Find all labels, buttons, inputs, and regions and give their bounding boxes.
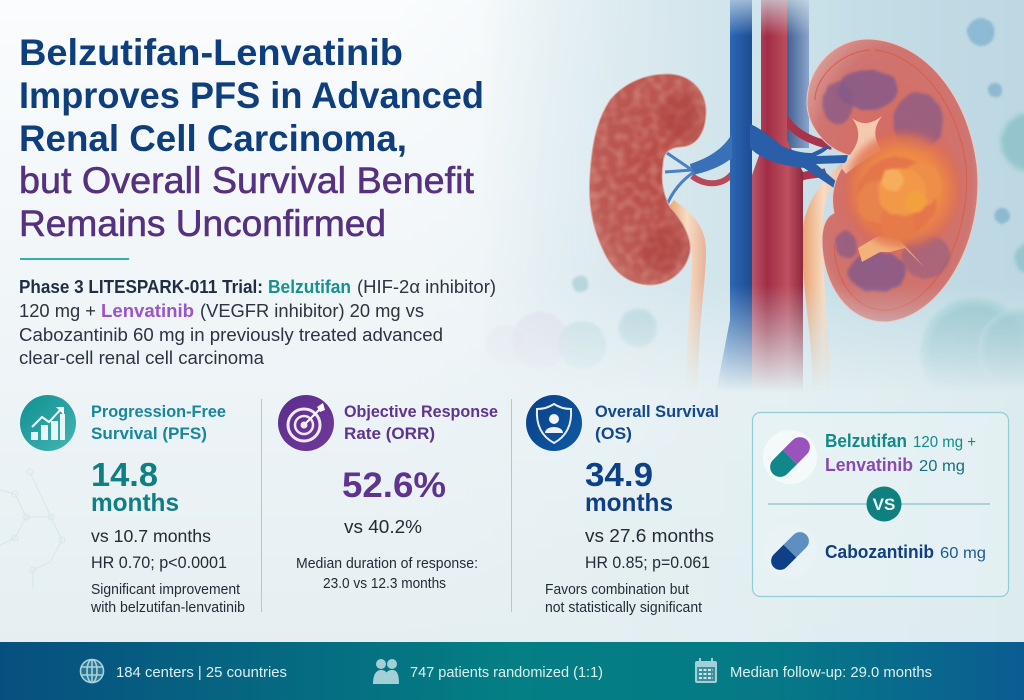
right renal vein xyxy=(750,124,848,194)
OS comparison: vs 27.6 months xyxy=(585,526,714,546)
ORR heading: Objective Response xyxy=(344,402,498,421)
cabozantinib label: Cabozantinib xyxy=(825,542,934,562)
OS comparison: Favors combination but xyxy=(545,582,689,598)
left kidney xyxy=(589,74,706,285)
left renal artery xyxy=(692,174,732,183)
PFS comparison: HR 0.70; p<0.0001 xyxy=(91,554,227,572)
ORR comparison: vs 40.2% xyxy=(344,516,422,537)
PFS value: 14.8 xyxy=(91,456,158,493)
trial description: clear-cell renal cell carcinoma xyxy=(19,348,265,368)
ORR comparison: 23.0 vs 12.3 months xyxy=(323,576,446,592)
trial description xyxy=(19,277,496,368)
renal pelvis xyxy=(840,116,882,174)
PFS comparison: vs 10.7 months xyxy=(91,526,211,546)
combination label: Lenvatinib xyxy=(825,455,913,475)
follow-up text: Median follow-up: 29.0 months xyxy=(730,664,932,681)
ORR comparison xyxy=(296,516,478,592)
OS value xyxy=(585,456,673,517)
PFS heading xyxy=(91,402,226,443)
panel: progression-free survival xyxy=(20,395,245,616)
icon: cabozantinib capsule xyxy=(763,524,817,578)
decorative cells xyxy=(513,17,1024,380)
trial description: Cabozantinib 60 mg in previously treated advanced xyxy=(19,325,443,345)
right renal arteries xyxy=(785,118,832,182)
aorta xyxy=(752,0,803,392)
icon: globe xyxy=(80,660,104,683)
icon: rising bar chart xyxy=(20,395,76,451)
title xyxy=(19,32,484,244)
title: Remains Unconfirmed xyxy=(19,203,386,244)
trial description: (VEGFR inhibitor) 20 mg vs xyxy=(200,301,424,321)
ORR heading: Rate (ORR) xyxy=(344,424,435,443)
centers text: 184 centers | 25 countries xyxy=(116,664,287,681)
combination label: 20 mg xyxy=(919,458,965,475)
ORR comparison: Median duration of response: xyxy=(296,556,478,572)
OS value: 34.9 xyxy=(585,456,653,493)
PFS comparison xyxy=(90,526,245,616)
footer bar xyxy=(0,642,1024,700)
trial description: Phase 3 LITESPARK-011 Trial: xyxy=(19,277,263,297)
icon: shield with person xyxy=(526,395,582,451)
PFS comparison: Significant improvement xyxy=(91,582,240,598)
PFS value xyxy=(91,456,179,517)
tumor xyxy=(841,128,965,252)
icon: calendar xyxy=(695,658,717,683)
illustration: kidneys and vessels xyxy=(589,0,978,392)
panel divider xyxy=(261,399,262,612)
title: Improves PFS in Advanced xyxy=(19,75,484,116)
right kidney with tumor xyxy=(807,39,978,322)
versus divider: VS xyxy=(873,495,895,514)
OS heading: Overall Survival xyxy=(595,402,719,421)
OS comparison: not statistically significant xyxy=(545,600,702,616)
PFS comparison: with belzutifan-lenvatinib xyxy=(90,600,245,616)
OS heading: (OS) xyxy=(595,424,632,443)
cabozantinib label: 60 mg xyxy=(940,545,986,562)
PFS value: months xyxy=(91,489,179,517)
patients text: 747 patients randomized (1:1) xyxy=(410,664,603,681)
panel: overall survival xyxy=(526,395,719,616)
combination label: Belzutifan xyxy=(825,431,907,451)
combination label xyxy=(825,431,976,475)
trial description: Lenvatinib xyxy=(101,301,194,321)
icon: combination capsule xyxy=(763,430,817,484)
trial description: Belzutifan xyxy=(268,277,351,297)
molecule network xyxy=(0,469,65,588)
PFS heading: Survival (PFS) xyxy=(91,424,207,443)
dark vein behind xyxy=(786,0,809,148)
medulla lobes xyxy=(823,70,950,292)
combination label: 120 mg + xyxy=(913,434,976,451)
OS comparison: HR 0.85; p=0.061 xyxy=(585,554,710,572)
right ureter xyxy=(803,163,843,382)
illustration top fade xyxy=(730,0,809,36)
panel: treatment comparison xyxy=(752,412,1008,596)
title: but Overall Survival Benefit xyxy=(19,160,475,201)
PFS heading: Progression-Free xyxy=(91,402,226,421)
OS heading xyxy=(595,402,719,443)
trial description: (HIF-2α inhibitor) xyxy=(357,277,496,297)
icon: target xyxy=(278,395,334,451)
trial description: 120 mg + xyxy=(19,301,96,321)
OS comparison xyxy=(545,526,714,616)
title: Belzutifan-Lenvatinib xyxy=(19,32,403,73)
icon: patients xyxy=(373,659,399,684)
versus divider xyxy=(768,486,990,522)
left renal vein xyxy=(665,134,732,205)
title: Renal Cell Carcinoma, xyxy=(19,118,407,159)
title accent rule xyxy=(20,258,129,260)
panel divider xyxy=(511,399,512,612)
panel: objective response rate xyxy=(278,395,498,592)
OS value: months xyxy=(585,489,673,517)
left ureter xyxy=(670,200,706,380)
vena cava xyxy=(716,0,752,392)
ORR value: 52.6% xyxy=(342,466,446,505)
ORR heading xyxy=(344,402,498,443)
